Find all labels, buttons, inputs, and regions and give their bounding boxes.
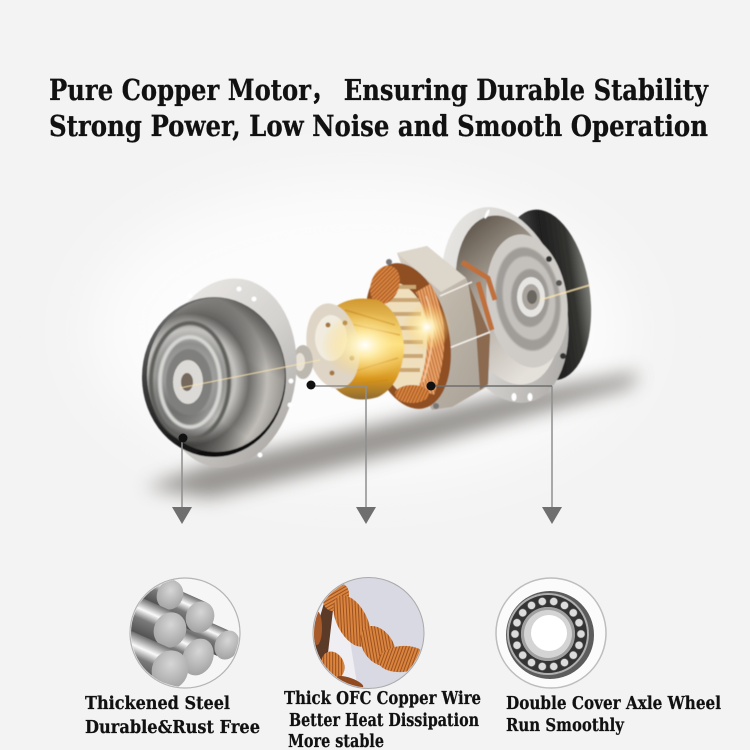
infographic canvas bbox=[50, 78, 721, 748]
commutator end bbox=[300, 299, 366, 393]
caption: bearing: Double Cover Axle Wheel bbox=[506, 694, 721, 714]
copper windings bbox=[353, 255, 463, 417]
callout arrow: copper bbox=[306, 380, 376, 524]
callout arrow: steel bbox=[172, 434, 192, 524]
title bbox=[49, 73, 709, 143]
icon: copper coils bbox=[312, 577, 424, 689]
caption: copper: Better Heat Dissipation bbox=[289, 711, 479, 731]
caption: copper: Thick OFC Copper Wire bbox=[284, 689, 481, 709]
caption: copper bbox=[284, 689, 481, 750]
exploded motor illustration bbox=[142, 193, 602, 477]
caption: steel bbox=[85, 694, 260, 738]
motor floor shadow bbox=[145, 372, 640, 498]
motor shaft bbox=[293, 345, 313, 379]
right end cap bbox=[421, 193, 602, 417]
caption: steel: Durable&Rust Free bbox=[85, 718, 260, 738]
caption: bearing bbox=[506, 694, 721, 736]
gold rotor bbox=[335, 299, 404, 400]
light flares bbox=[180, 285, 590, 388]
caption: bearing: Run Smoothly bbox=[506, 716, 625, 736]
left end cap bbox=[142, 269, 309, 477]
icon: ball bearing bbox=[496, 578, 606, 688]
icon: steel rods bbox=[129, 577, 241, 689]
stator housing bbox=[397, 246, 495, 410]
caption: steel: Thickened Steel bbox=[85, 694, 230, 714]
callout arrow: bearing bbox=[426, 382, 562, 524]
